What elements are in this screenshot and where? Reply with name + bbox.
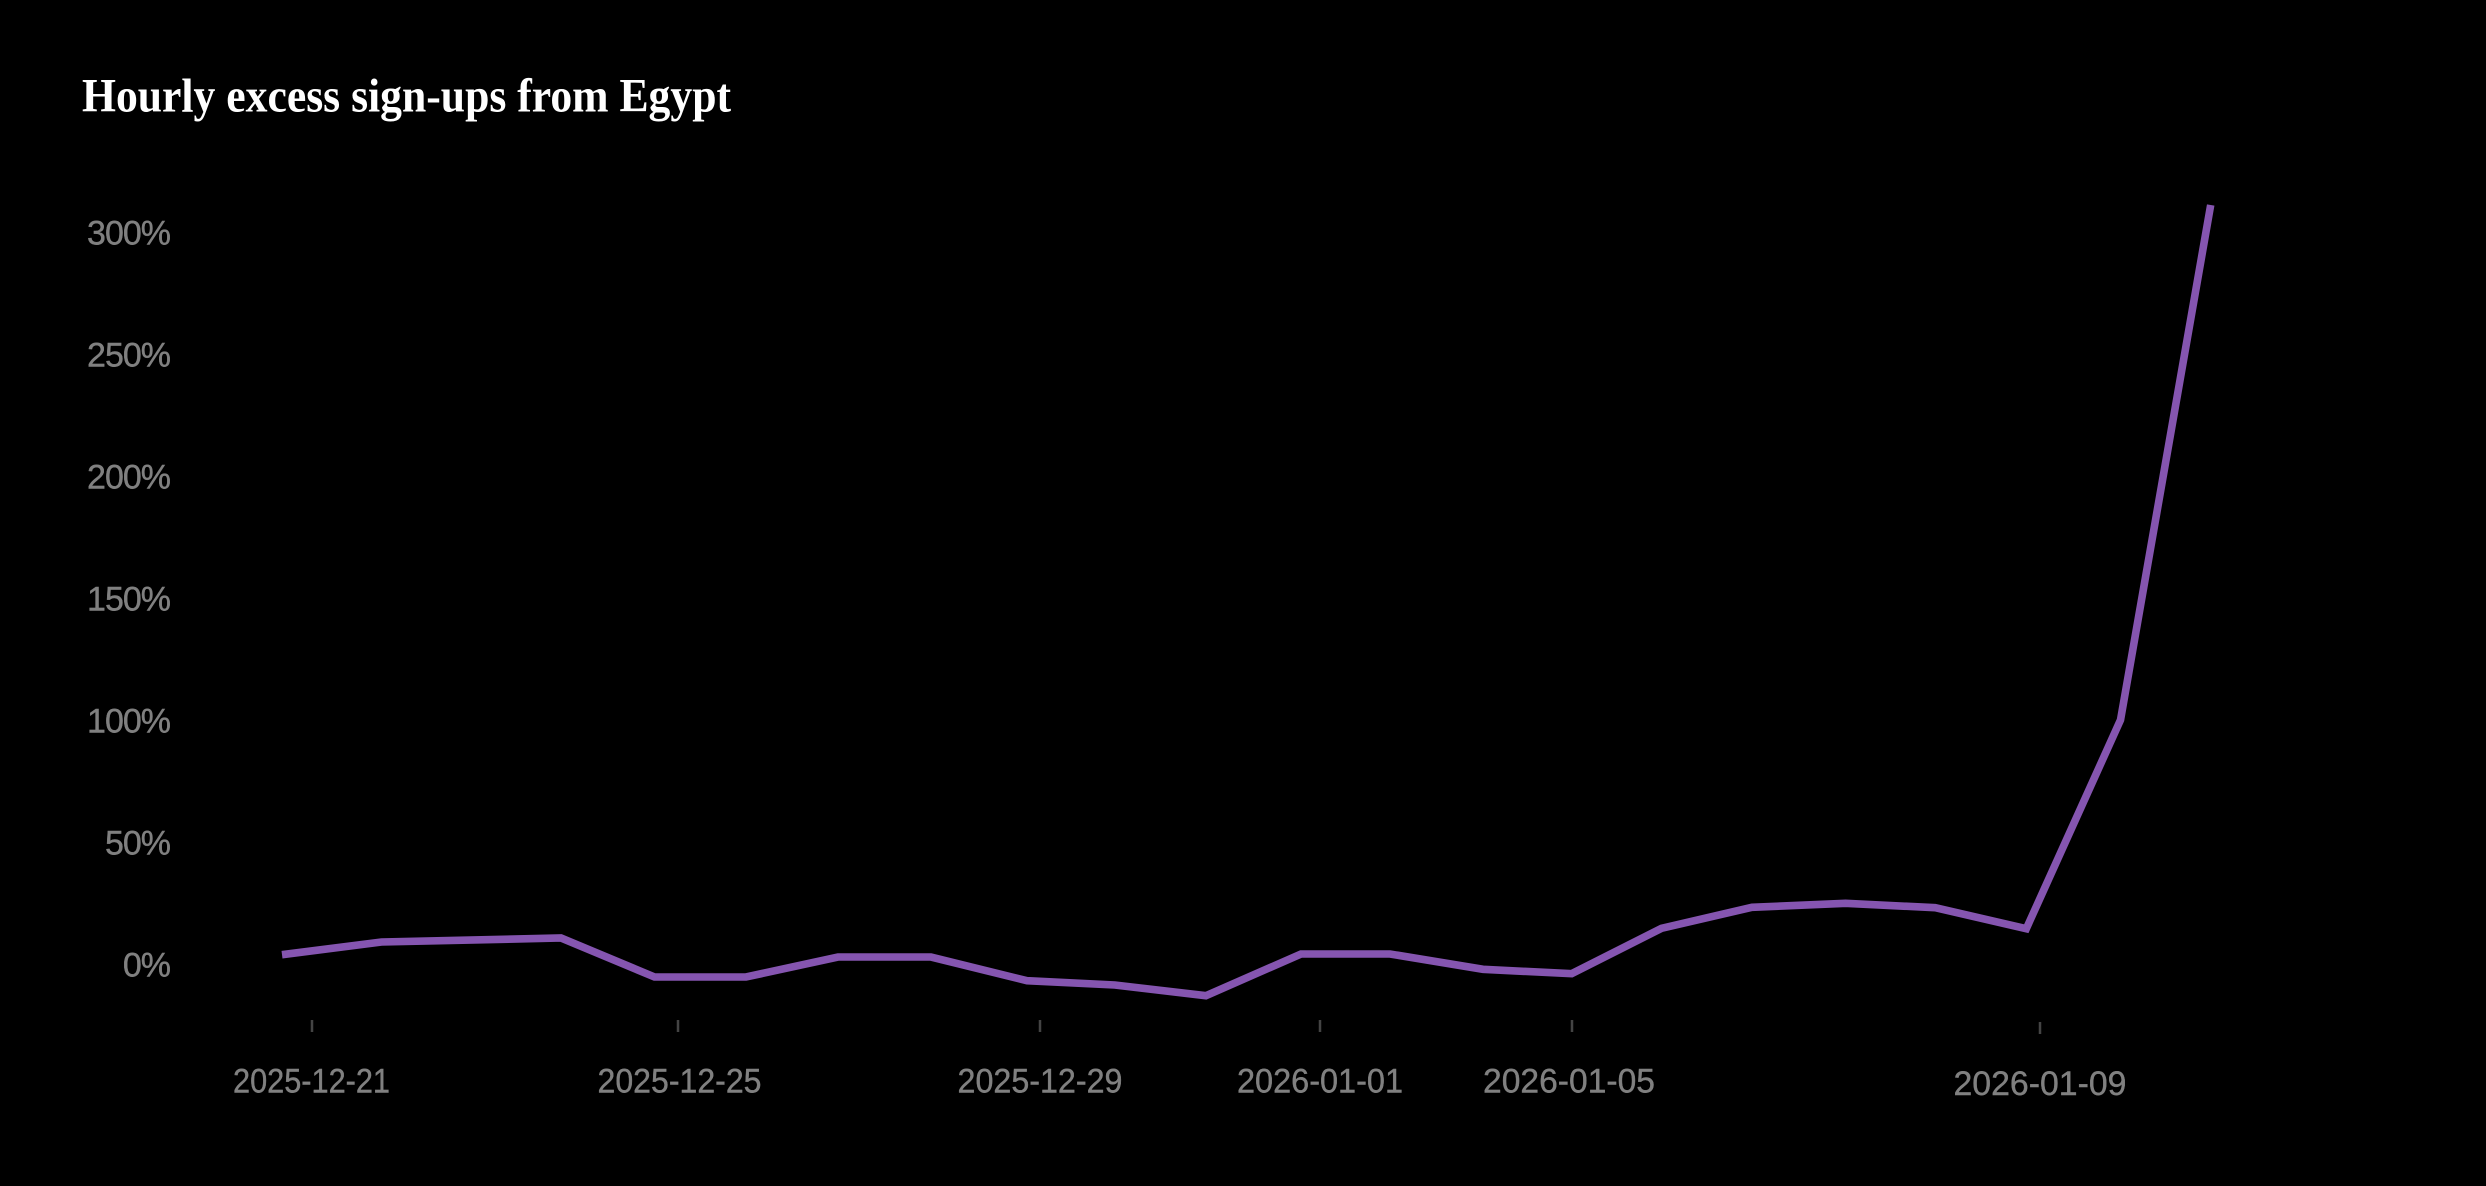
y axis labels: 0% — [123, 946, 171, 984]
x axis date labels: 2026-01-09 — [1954, 1065, 2126, 1103]
x axis date labels: 2026-01-05 — [1483, 1062, 1655, 1100]
x axis date labels: 2025-12-21 — [233, 1062, 390, 1100]
y axis labels: 200% — [87, 458, 171, 496]
y axis labels — [87, 214, 171, 984]
data line — [282, 205, 2211, 996]
x axis date labels: 2026-01-01 — [1237, 1062, 1403, 1100]
x axis tick marks — [312, 1020, 2040, 1034]
y axis labels: 100% — [87, 702, 171, 740]
x axis date labels: 2025-12-29 — [958, 1062, 1122, 1100]
x axis date labels: 2025-12-25 — [598, 1062, 762, 1100]
y axis labels: 250% — [87, 336, 171, 374]
y axis labels: 300% — [87, 214, 171, 252]
y axis labels: 50% — [105, 824, 171, 862]
x axis date labels — [233, 1062, 2126, 1103]
y axis labels: 150% — [87, 580, 171, 618]
title: Hourly excess sign-ups from Egypt — [82, 70, 731, 123]
